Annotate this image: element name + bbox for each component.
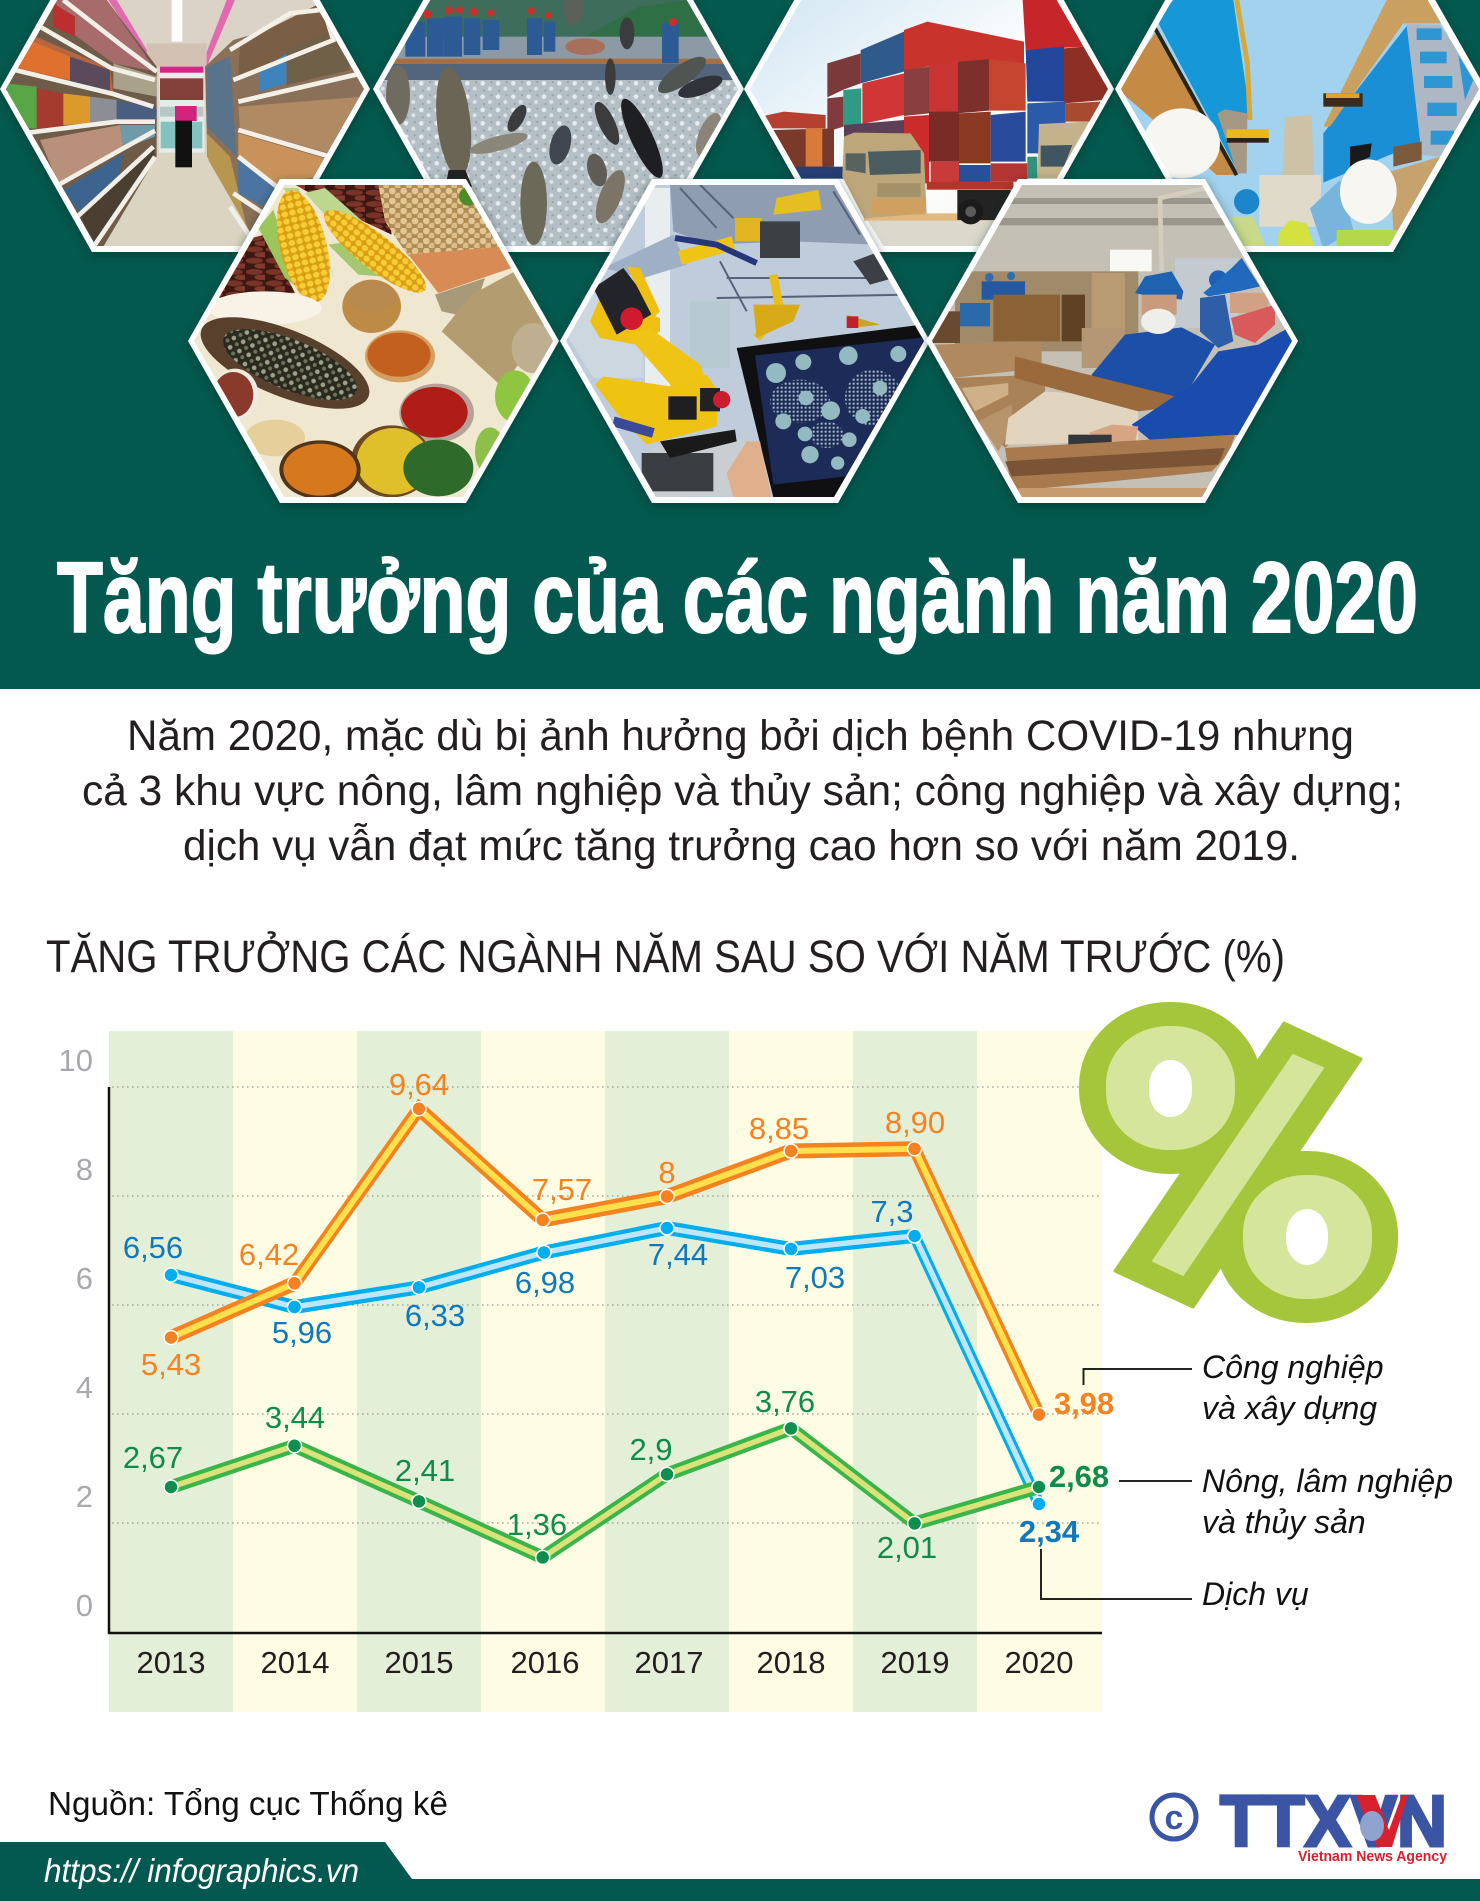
blue value labels: 2,34 <box>1019 1514 1080 1549</box>
green value labels <box>123 1384 1109 1565</box>
y axis labels: 0 <box>76 1588 93 1623</box>
blue value labels: 7,44 <box>648 1237 708 1272</box>
orange value labels <box>141 1067 1114 1421</box>
x axis labels: 2017 <box>635 1645 703 1680</box>
series: công nghiệp và xây dựng (orange line) <box>164 1102 1046 1422</box>
y axis labels: 6 <box>76 1261 93 1296</box>
y axis labels: 4 <box>76 1370 93 1405</box>
orange value labels: 8,90 <box>885 1105 945 1140</box>
orange value labels: 3,98 <box>1054 1386 1114 1421</box>
orange value labels: 7,57 <box>532 1172 592 1207</box>
blue value labels: 6,33 <box>405 1298 465 1333</box>
x axis labels: 2016 <box>511 1645 579 1680</box>
axes <box>109 1087 1102 1633</box>
x axis labels <box>137 1645 1073 1680</box>
photo hexagon: supermarket aisle <box>0 0 372 256</box>
blue value labels <box>123 1194 1080 1549</box>
website url: https:// infographics.vn <box>44 1852 359 1889</box>
legend: công nghiệp và xây dựng <box>1202 1349 1383 1426</box>
photo hexagon: construction site <box>1110 0 1480 256</box>
photo hexagon: grains and spices <box>185 178 565 508</box>
legend: nông, lâm nghiệp và thủy sản: Nông, lâm nghiệp <box>1202 1463 1453 1499</box>
logo: TTXVN: TTXVN <box>1220 1782 1447 1862</box>
legend: nông, lâm nghiệp và thủy sản <box>1202 1463 1453 1540</box>
x axis labels: 2013 <box>137 1645 205 1680</box>
header background band <box>0 0 1480 689</box>
chart heading: TĂNG TRƯỞNG CÁC NGÀNH NĂM SAU SO VỚI NĂM TRƯỚC (%) <box>46 931 1285 982</box>
logo: TTXVN: c <box>1165 1799 1183 1837</box>
footer band <box>0 1842 1480 1901</box>
y axis labels: 10 <box>59 1043 93 1078</box>
line chart <box>59 1031 1114 1712</box>
x axis labels: 2020 <box>1005 1645 1073 1680</box>
intro paragraph: cả 3 khu vực nông, lâm nghiệp và thủy sản; công nghiệp và xây dựng; <box>82 767 1403 815</box>
photo hexagon: shipping containers and truck <box>744 0 1116 256</box>
intro paragraph <box>82 712 1403 870</box>
legend: công nghiệp và xây dựng: Công nghiệp <box>1202 1349 1383 1385</box>
legend: nông, lâm nghiệp và thủy sản: và thủy sản <box>1202 1504 1366 1540</box>
y axis labels: 2 <box>76 1479 93 1514</box>
green value labels: 3,76 <box>755 1384 815 1419</box>
photo hexagon: wood factory workers <box>925 178 1305 508</box>
intro paragraph: dịch vụ vẫn đạt mức tăng trưởng cao hơn so với năm 2019. <box>183 822 1300 870</box>
blue value labels: 7,03 <box>785 1260 845 1295</box>
source: Nguồn: Tổng cục Thống kê <box>48 1785 448 1822</box>
series: dịch vụ (blue line) <box>164 1221 1046 1511</box>
orange value labels: 8,85 <box>749 1111 809 1146</box>
legend: dịch vụ: Dịch vụ <box>1202 1576 1309 1612</box>
x axis labels: 2018 <box>757 1645 825 1680</box>
x axis labels: 2019 <box>881 1645 949 1680</box>
legend leader lines <box>1041 1369 1192 1599</box>
series: nông, lâm nghiệp và thủy sản (green line) <box>164 1421 1046 1564</box>
y axis labels: 8 <box>76 1152 93 1187</box>
green value labels: 2,41 <box>395 1453 455 1488</box>
orange value labels: 6,42 <box>239 1237 299 1272</box>
x axis labels: 2015 <box>385 1645 453 1680</box>
logo: TTXVN: Vietnam News Agency <box>1298 1848 1448 1865</box>
orange value labels: 8 <box>658 1155 676 1190</box>
green value labels: 2,67 <box>123 1440 183 1475</box>
green value labels: 2,68 <box>1049 1459 1109 1494</box>
green value labels: 2,9 <box>629 1432 673 1467</box>
green value labels: 3,44 <box>265 1400 325 1435</box>
photo hexagon: fish farming <box>372 0 744 256</box>
orange value labels: 5,43 <box>141 1347 201 1382</box>
x axis labels: 2014 <box>261 1645 329 1680</box>
intro paragraph: Năm 2020, mặc dù bị ảnh hưởng bởi dịch bệnh COVID-19 nhưng <box>127 712 1354 760</box>
icon: large percent sign <box>1079 1002 1398 1323</box>
legend: công nghiệp và xây dựng: và xây dựng <box>1202 1390 1377 1426</box>
green value labels: 2,01 <box>877 1530 937 1565</box>
blue value labels: 6,56 <box>123 1230 183 1265</box>
blue value labels: 6,98 <box>515 1265 575 1300</box>
photo hexagon: industrial robot and tablet <box>560 178 935 508</box>
blue value labels: 7,3 <box>870 1194 914 1229</box>
chart background stripes <box>109 1031 1102 1712</box>
green value labels: 1,36 <box>507 1507 567 1542</box>
y axis labels <box>59 1043 93 1623</box>
orange value labels: 9,64 <box>389 1067 449 1102</box>
blue value labels: 5,96 <box>272 1315 332 1350</box>
